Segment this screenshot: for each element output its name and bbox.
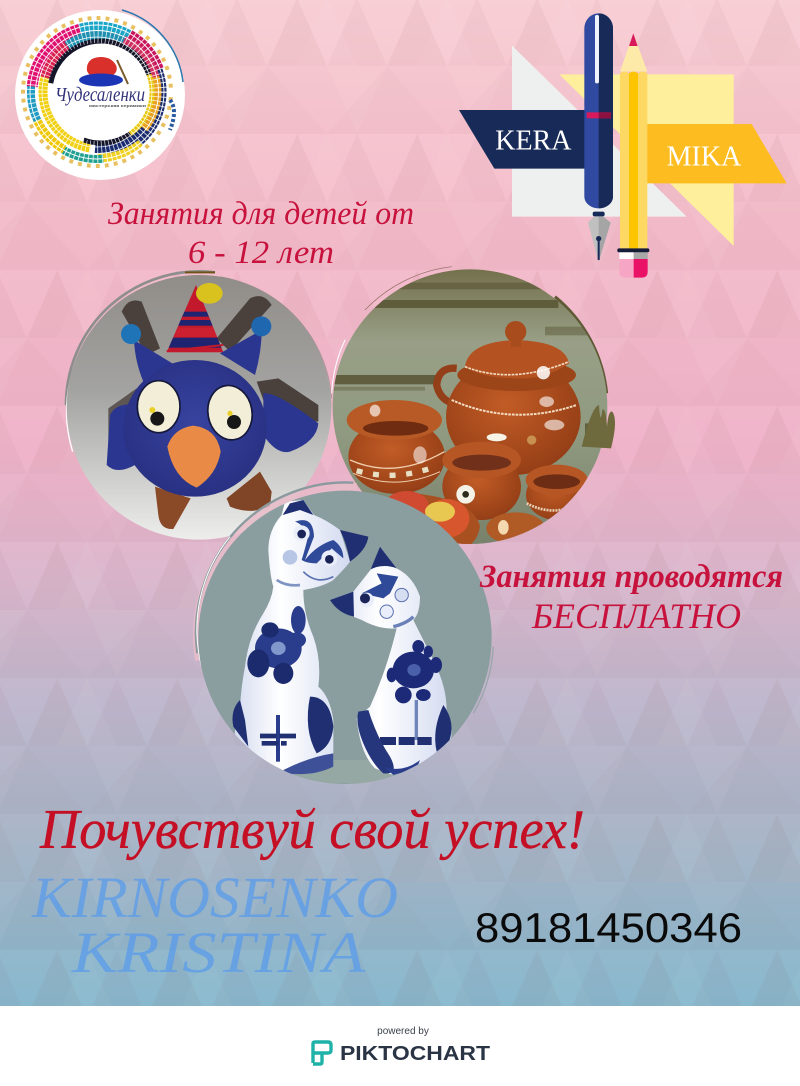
flower left: [247, 606, 306, 684]
brush ring around owl photo: [66, 271, 332, 452]
banner: MIKA: [647, 124, 787, 183]
text: free classes: БЕСПЛАТНО: [531, 596, 741, 636]
powered by label: powered by: [377, 1026, 429, 1037]
logo wordmark: Чудесаленки: [55, 84, 145, 106]
owl wings: [106, 404, 135, 470]
owl feet: [155, 487, 191, 529]
Piktochart wordmark: PIKTOCHART: [340, 1043, 490, 1065]
owl shadows: [108, 296, 318, 445]
footer: powered by Piktochart: [313, 1026, 490, 1065]
logo tagline: мастерская керамики: [89, 103, 147, 108]
grey triangle backdrop: [512, 46, 687, 217]
text: free classes: [479, 559, 783, 636]
logo emblem: red pot and blue cushion: [79, 57, 128, 86]
brush frays on pots photo: [582, 405, 615, 448]
banner: MIKA: MIKA: [667, 142, 741, 173]
slogan: Почувствуй свой успех!: [39, 799, 585, 861]
icon: Piktochart logo: [313, 1042, 331, 1064]
bottom bowl: [486, 512, 544, 541]
bowl with apples: [388, 491, 480, 544]
logo: Чудесаленки: [4, 0, 190, 185]
brush ring around cats photo: [196, 482, 493, 713]
cat left: [232, 500, 368, 774]
banner: KERA: [459, 110, 587, 169]
footer strip: [0, 1006, 800, 1086]
phone number: 89181450346: [475, 904, 742, 951]
text: teacher name: KRISTINA: [71, 920, 366, 985]
owl eyes: [137, 381, 256, 443]
owl hat: [166, 283, 224, 352]
text: age range: 6 - 12 лет: [188, 235, 334, 271]
flower right: [387, 640, 442, 703]
big lidded pot: [437, 321, 581, 475]
text: teacher name: [31, 865, 398, 985]
owl body: [123, 360, 267, 497]
left pot: [347, 400, 445, 494]
icon: pencil: [617, 33, 649, 278]
photo: terracotta pots: [325, 260, 625, 550]
yellow triangle backdrop: [559, 74, 734, 246]
brush ring around pots photo: [332, 267, 607, 393]
owl ears: [134, 342, 172, 382]
text: age range: [108, 196, 414, 271]
photo: ceramic owl: [60, 265, 340, 545]
text: age range: Занятия для детей от: [108, 196, 414, 232]
owl beak: [167, 426, 221, 488]
small right pot: [526, 465, 588, 520]
middle pot: [442, 442, 521, 520]
graphic: KERA MIKA pen and pencil: [459, 13, 787, 278]
banner: KERA: KERA: [495, 125, 571, 156]
photo: porcelain cats: [190, 480, 500, 790]
icon: fountain pen: [584, 13, 613, 262]
cat right: [330, 547, 452, 775]
text: free classes: Занятия проводятся: [479, 559, 783, 595]
text: teacher name: KIRNOSENKO: [31, 865, 398, 930]
